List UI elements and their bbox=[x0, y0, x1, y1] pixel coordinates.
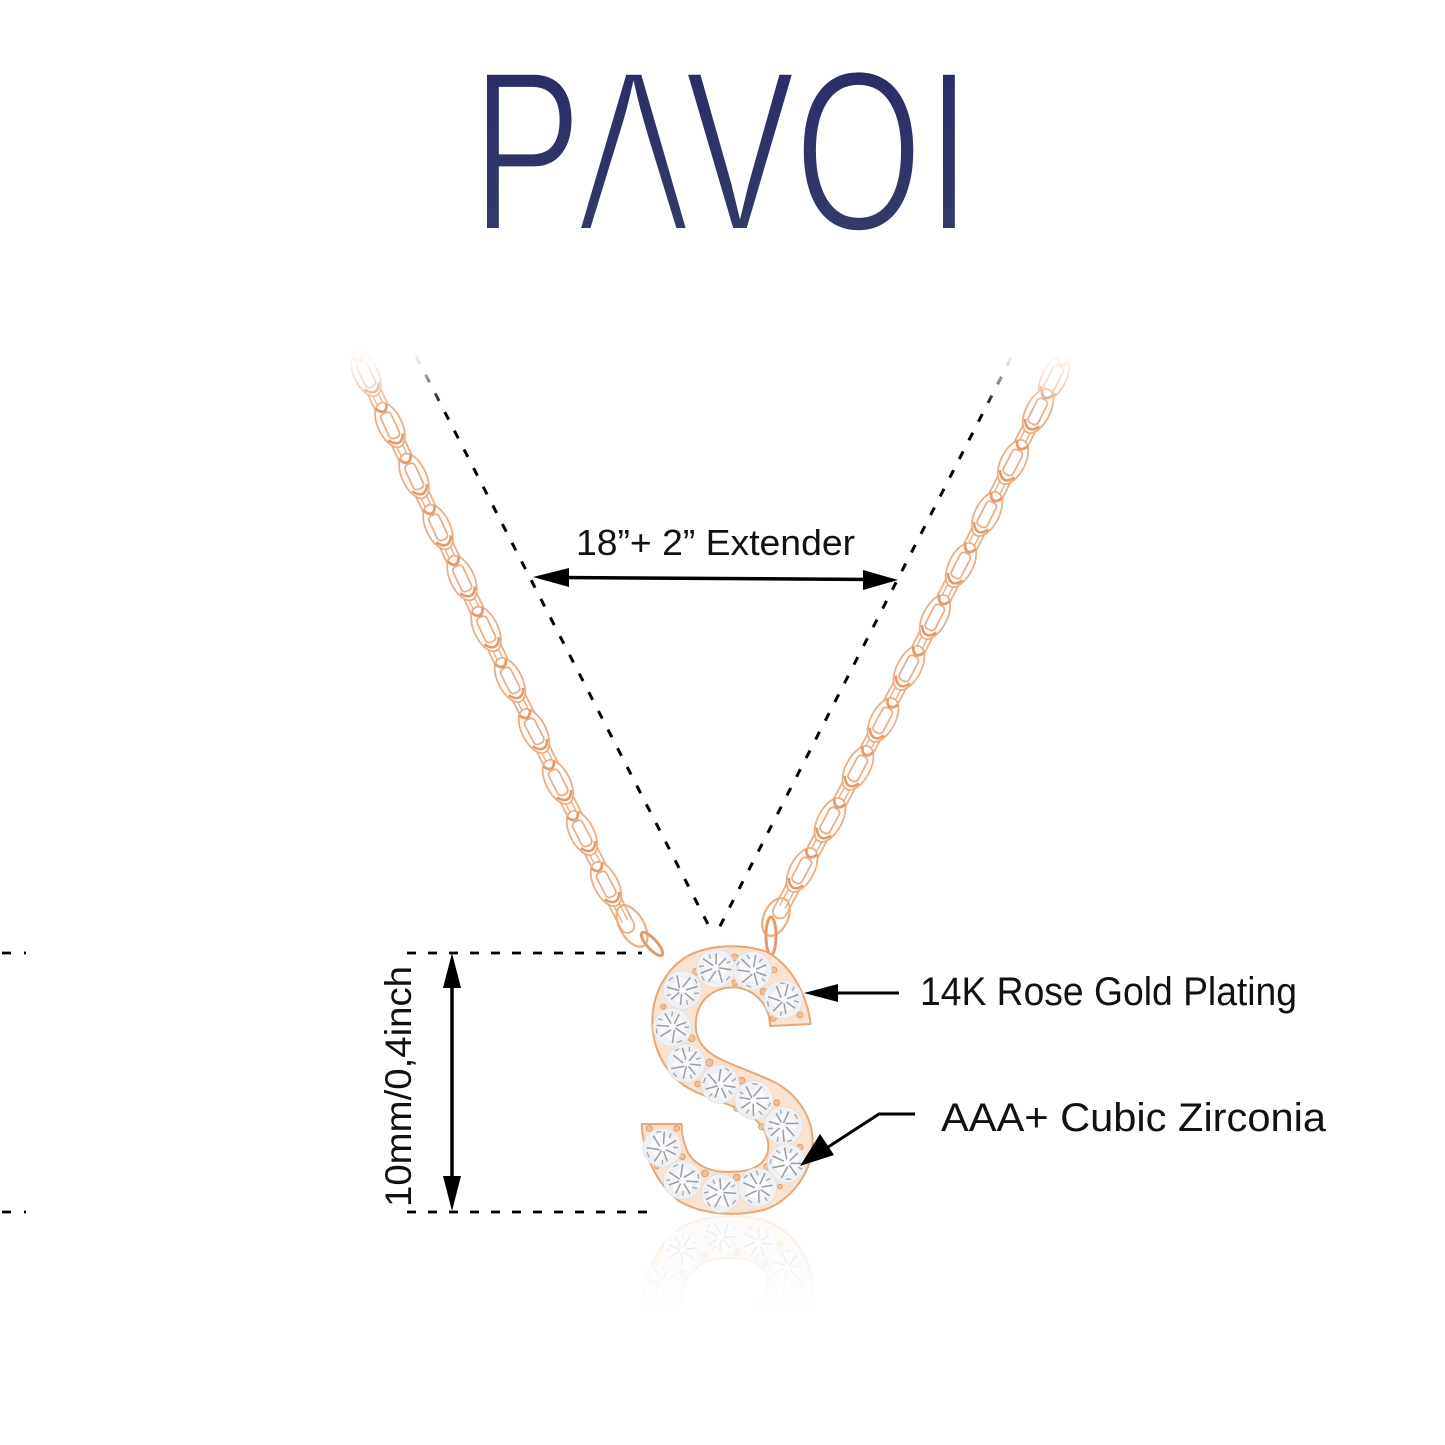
arrow: chain width bbox=[533, 568, 898, 590]
cubic zirconia stones bbox=[635, 945, 813, 1216]
logo: PAVOI: PAVOI bbox=[472, 24, 972, 280]
dashed guide: necklace V bbox=[416, 356, 1011, 934]
S pendant bbox=[635, 945, 813, 1216]
plating label: 14K Rose Gold Plating bbox=[920, 970, 1297, 1014]
prongs bbox=[646, 954, 803, 1189]
pendant body bbox=[642, 946, 813, 1214]
arrow: pendant height bbox=[443, 953, 461, 1211]
height label: 10mm/0,4inch bbox=[378, 966, 419, 1207]
top fade of chain and guides bbox=[335, 340, 1080, 410]
length label: 18”+ 2” Extender bbox=[576, 522, 855, 563]
dashed guides: pendant height bbox=[2, 953, 652, 1212]
arrow: plating callout bbox=[804, 984, 899, 1002]
pendant reflection bbox=[635, 1214, 813, 1445]
arrow: zirconia callout bbox=[800, 1114, 915, 1166]
chain: left strand bbox=[345, 347, 666, 958]
chain: right strand bbox=[757, 351, 1076, 955]
zirconia label: AAA+ Cubic Zirconia bbox=[941, 1096, 1327, 1140]
